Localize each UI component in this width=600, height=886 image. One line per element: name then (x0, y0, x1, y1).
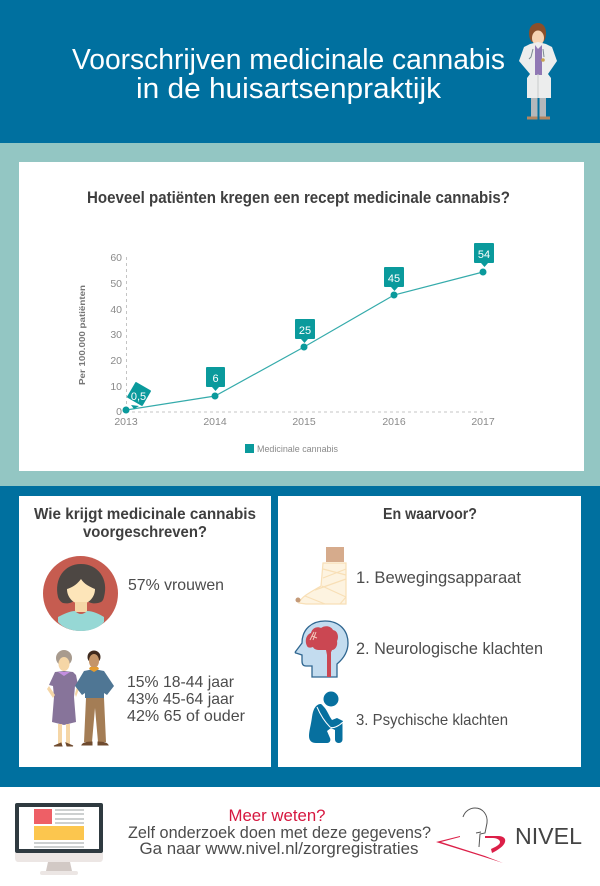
footer text: Meer weten? (228, 807, 326, 825)
data points (122, 268, 486, 414)
data label 6 (206, 367, 225, 391)
y axis labels: 60 (110, 252, 122, 264)
why text 1: 1. Bewegingsapparaat (356, 568, 521, 587)
logo: NIVEL (436, 808, 582, 863)
icon: leg in cast (296, 547, 346, 604)
why heading: En waarvoor? (383, 506, 477, 523)
panel: why (278, 496, 581, 767)
footer text (128, 807, 431, 858)
data line (126, 272, 483, 410)
y axis labels: 10 (110, 381, 122, 393)
x axis labels: 2017 (471, 416, 495, 428)
lower blue band (0, 486, 600, 787)
data label 54 (474, 243, 494, 267)
y axis title: Per 100.000 patiënten (77, 285, 87, 385)
title: Voorschrijven medicinale cannabis (72, 44, 505, 76)
y axis labels: 40 (110, 304, 122, 316)
panel: who (19, 496, 271, 767)
icon: sitting figure (309, 692, 343, 743)
who text: women: 57% vrouwen (128, 577, 224, 594)
chart heading: Hoeveel patiënten kregen een recept medicinale cannabis? (87, 189, 510, 207)
legend: Medicinale cannabis (257, 444, 338, 454)
icon: doctor (519, 23, 557, 120)
header band (0, 0, 600, 143)
title (72, 44, 505, 105)
x axis labels: 2014 (203, 416, 227, 428)
icon: woman (43, 556, 118, 631)
who text: ages: 42% 65 of ouder (127, 708, 246, 725)
data label 45 (384, 267, 404, 291)
data label 0.5: 0,5 (131, 391, 146, 403)
title: in de huisartsenpraktijk (136, 73, 442, 105)
logo: NIVEL: NIVEL (515, 823, 582, 849)
x axis labels: 2015 (292, 416, 316, 428)
y axis labels: 50 (110, 278, 122, 290)
who text: ages: 43% 45-64 jaar (127, 691, 235, 708)
who heading: voorgeschreven? (83, 524, 207, 541)
data label 45: 45 (388, 273, 400, 285)
icon: head with brain (295, 621, 348, 677)
footer (0, 787, 600, 886)
x axis labels (114, 416, 495, 428)
teal band (0, 143, 600, 486)
footer text: Ga naar www.nivel.nl/zorgregistraties (140, 840, 418, 858)
panel: line chart (19, 162, 584, 471)
y axis labels: 30 (110, 329, 122, 341)
who text: ages (127, 674, 246, 725)
why text 2: 2. Neurologische klachten (356, 640, 543, 658)
why text 3: 3. Psychische klachten (356, 712, 508, 729)
y axis labels (110, 252, 122, 418)
icon: computer (15, 803, 103, 875)
data label 25 (295, 319, 315, 343)
data label 54: 54 (478, 249, 490, 261)
x axis labels: 2013 (114, 416, 138, 428)
data label 25: 25 (299, 325, 311, 337)
who heading (34, 506, 256, 541)
icon: couple (47, 650, 114, 746)
y axis labels: 0 (116, 406, 122, 418)
footer text: Zelf onderzoek doen met deze gegevens? (128, 824, 431, 842)
data label 6: 6 (212, 373, 219, 385)
who heading: Wie krijgt medicinale cannabis (34, 506, 256, 523)
who text: ages: 15% 18-44 jaar (127, 674, 235, 691)
y axis labels: 20 (110, 355, 122, 367)
data label 0.5 (127, 382, 151, 409)
x axis labels: 2016 (382, 416, 406, 428)
